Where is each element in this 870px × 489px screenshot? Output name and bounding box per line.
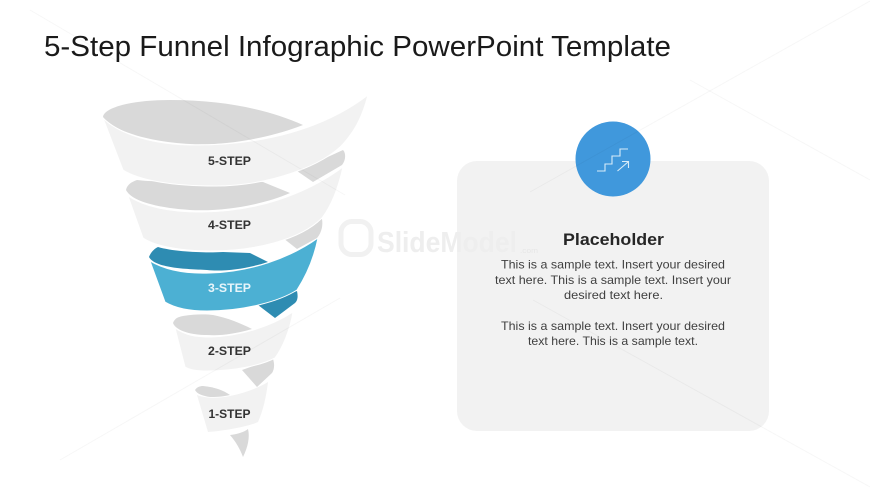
step 4 segment: 4-STEP [208,220,251,232]
text block: second paragraph: text here. This is a sample text. [528,334,698,348]
step 2 segment [173,312,293,387]
step 2 segment: 2-STEP [208,346,251,358]
panel: text card [341,161,769,431]
watermark: SlideModel logo: .com [520,248,538,255]
watermark: SlideModel logo: SlideModel [377,227,517,259]
step 3 segment (highlighted): 3-STEP [208,283,251,295]
text block: first paragraph: This is a sample text. Insert your desired [501,258,725,272]
text block: second paragraph [501,319,725,348]
heading: placeholder: Placeholder [563,231,665,249]
icon: blue circle with stairs and arrow [576,122,650,196]
step 5 segment [103,95,368,186]
text block: first paragraph: text here. This is a sample text. Insert your [495,273,731,287]
step 1 segment: 1-STEP [208,409,251,421]
watermark: SlideModel logo [341,222,538,259]
step 4 segment [126,167,343,251]
text block: first paragraph [495,258,731,302]
text block: first paragraph: desired text here. [564,288,663,302]
step 3 segment (highlighted) [149,238,318,318]
step 5 segment: 5-STEP [208,156,251,168]
text block: second paragraph: This is a sample text. Insert your desired [501,319,725,333]
step 1 segment [195,382,268,432]
funnel infographic [103,95,368,457]
funnel tip [230,429,249,457]
title: 5-Step Funnel Infographic PowerPoint Template [44,31,671,63]
